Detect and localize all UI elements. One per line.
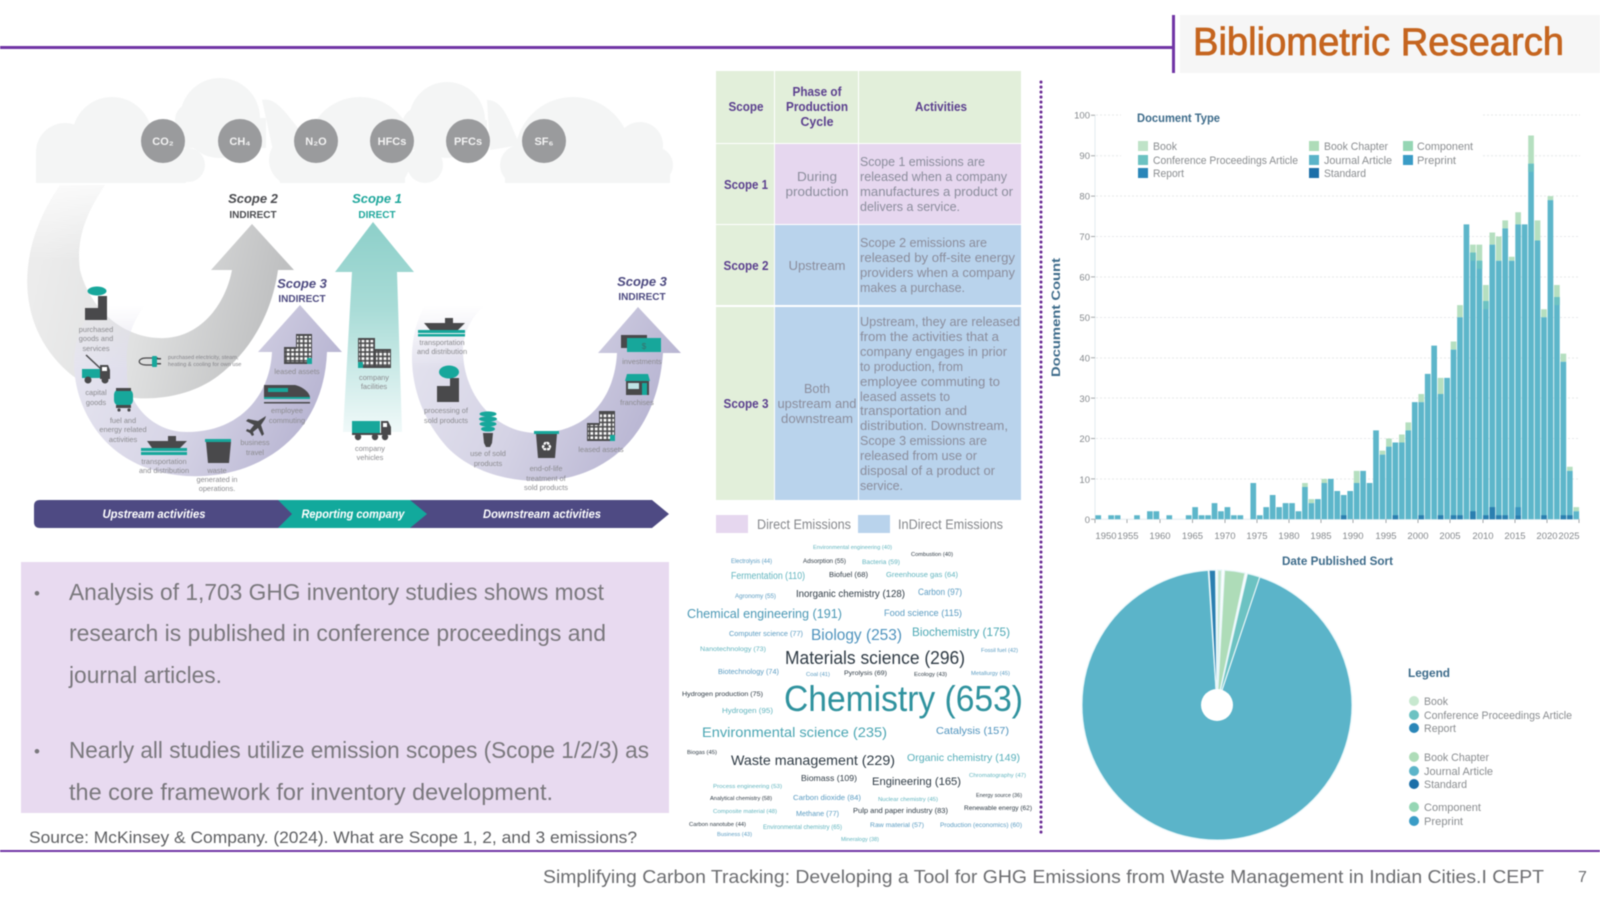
icon: processing factory: [437, 366, 459, 402]
x axis: 1965: [1182, 531, 1203, 542]
word cloud: Pulp and paper industry (83): [853, 806, 949, 815]
row: scope 1: Scope 1: [724, 177, 768, 192]
activity labels: use of sold: [470, 449, 506, 458]
word cloud: Biology (253): [811, 627, 902, 644]
row: scope 2: released by off-site energy: [860, 250, 1015, 265]
word cloud: Fossil fuel (42): [981, 648, 1018, 654]
activities bar: [34, 500, 669, 528]
word cloud: Bacteria (59): [862, 559, 900, 566]
activity labels: leased assets: [274, 367, 320, 376]
word cloud: Energy source (36): [976, 793, 1022, 799]
row: scope 3: leased assets to: [860, 389, 950, 404]
word cloud: Metallurgy (45): [971, 671, 1010, 677]
y axis: 50: [1079, 313, 1090, 324]
word cloud: Carbon (97): [918, 587, 962, 597]
word cloud: Carbon dioxide (84): [793, 793, 862, 802]
chart legend: Preprint: [1417, 155, 1456, 167]
chart legend: Report: [1153, 168, 1184, 180]
row: scope 3: employee commuting to: [860, 374, 1000, 389]
icon: waste container: [205, 439, 231, 463]
scope labels: INDIRECT: [229, 210, 277, 221]
row: scope 1: delivers a service.: [860, 199, 960, 214]
row: scope 3: released from use or: [860, 448, 978, 463]
pie legend: Book: [1424, 696, 1448, 708]
word cloud: Biogas (45): [687, 750, 717, 756]
activity labels: goods and: [79, 334, 113, 343]
y axis: 30: [1079, 394, 1090, 405]
scope labels: Scope 1: [352, 191, 402, 206]
chart legend: Book Chapter: [1324, 141, 1388, 153]
icon: train: [264, 385, 310, 404]
x axis: [1095, 519, 1580, 542]
activity labels: company: [355, 444, 385, 453]
row: scope 2: [724, 235, 1015, 295]
row: scope 3: service.: [860, 478, 903, 493]
word cloud: Ecology (43): [914, 672, 947, 678]
y axis: 80: [1079, 192, 1090, 202]
scope labels: DIRECT: [358, 210, 396, 221]
chart legend: Standard: [1324, 168, 1366, 180]
icon: bulb: [479, 411, 497, 447]
greenhouse gas circles: SF₆: [534, 136, 554, 148]
scope labels: Scope 2: [228, 191, 279, 206]
greenhouse gas circles: CH₄: [229, 136, 251, 148]
word cloud: Mineralogy (38): [841, 837, 879, 843]
chart legend: Component: [1417, 141, 1473, 153]
activity labels: sold products: [424, 416, 468, 425]
activity labels: and distribution: [417, 347, 467, 356]
y axis: 10: [1079, 475, 1090, 486]
activity labels: facilities: [361, 382, 387, 391]
icon: investments money: $: [642, 342, 647, 351]
x axis: 1950: [1095, 531, 1117, 542]
word cloud: Chemical engineering (191): [687, 606, 842, 621]
scope labels: INDIRECT: [618, 292, 666, 303]
x axis: 2015: [1504, 531, 1526, 542]
y axis title: Document Count: [1049, 258, 1063, 377]
footer: 7: [1578, 869, 1587, 886]
bars: [1098, 135, 1576, 519]
word cloud: Pyrolysis (69): [844, 670, 887, 677]
row: scope 3: Scope 3 emissions are: [860, 433, 987, 448]
pie legend: Legend: [1408, 666, 1450, 680]
icon: leased assets downstream: [587, 411, 615, 441]
activity labels: leased assets: [578, 445, 624, 454]
row: scope 2: Scope 2 emissions are: [860, 235, 987, 250]
word cloud: Food science (115): [884, 608, 962, 618]
activity labels: services: [82, 344, 110, 353]
word cloud: Electrolysis (44): [731, 559, 772, 565]
x axis: 1960: [1149, 531, 1171, 542]
table header: Cycle: [800, 114, 834, 129]
icon: leased assets upstream: [284, 334, 312, 364]
y axis: 60: [1079, 272, 1090, 284]
word cloud: Environmental engineering (40): [813, 545, 892, 551]
word cloud: Waste management (229): [731, 752, 895, 768]
table header: Activities: [915, 99, 967, 114]
activity labels: [79, 325, 662, 493]
activities bar: Reporting company: [302, 507, 406, 521]
pie legend: Conference Proceedings Article: [1424, 710, 1572, 722]
word cloud: Adsorption (55): [803, 558, 846, 565]
word cloud: Engineering (165): [872, 776, 961, 788]
word cloud: Chromatography (47): [969, 773, 1026, 779]
word cloud: Process engineering (53): [713, 784, 782, 790]
header rule: [0, 15, 1175, 73]
icon: recycling bin: [534, 431, 559, 458]
row: scope 2: Upstream: [788, 258, 846, 273]
activity labels: heating & cooling for own use: [168, 362, 241, 368]
pie legend: Book Chapter: [1424, 752, 1489, 764]
panel: key findings: research is published in conference proceedings and: [69, 620, 606, 646]
row: scope 2: makes a purchase.: [860, 280, 965, 295]
chart legend: Book: [1153, 141, 1177, 153]
row: scope 3: company engages in prior: [860, 344, 1008, 359]
word cloud: Raw material (57): [870, 822, 924, 829]
word cloud: Methane (77): [796, 811, 839, 818]
word cloud: Agronomy (55): [735, 594, 776, 600]
icon: investments money: [621, 335, 661, 352]
panel: document count bar chart: [1049, 110, 1580, 542]
table legend: Direct Emissions: [757, 517, 851, 532]
row: scope 3: transportation and: [860, 403, 967, 418]
pie legend: Preprint: [1424, 816, 1463, 828]
row: scope 1: released when a company: [860, 169, 1007, 184]
icon: company vehicle: [352, 421, 391, 440]
word cloud: Catalysis (157): [936, 725, 1009, 737]
panel: scope table: [716, 71, 1021, 500]
word cloud: Hydrogen (95): [722, 706, 774, 715]
activities bar: Downstream activities: [483, 507, 601, 521]
scope labels: [228, 191, 668, 305]
x axis: 1975: [1246, 531, 1268, 542]
word cloud: Inorganic chemistry (128): [796, 589, 905, 600]
activity labels: purchased: [79, 325, 113, 334]
icon: recycling bin: ♻: [541, 439, 552, 454]
activity labels: products: [474, 459, 502, 468]
icon: company facilities: [358, 338, 391, 368]
panel: document type pie chart: [1082, 554, 1572, 840]
y axis: 70: [1079, 232, 1090, 243]
panel: key findings: Nearly all studies utilize emission scopes (Scope 1/2/3) as: [69, 737, 649, 763]
row: scope 3: Scope 3: [724, 396, 768, 411]
greenhouse gas circles: HFCs: [378, 136, 406, 148]
activity labels: company: [359, 373, 389, 382]
word cloud: Biotechnology (74): [718, 669, 779, 676]
word cloud: Nuclear chemistry (45): [878, 797, 938, 803]
activity labels: processing of: [424, 406, 469, 415]
panel: key findings: •: [34, 584, 40, 603]
activity labels: treatment of: [526, 474, 567, 483]
row: scope 3: distribution. Downstream,: [860, 418, 1008, 433]
footer: Simplifying Carbon Tracking: Developing a Tool for GHG Emissions from Waste Management in Indian Cities.I CEPT: [543, 867, 1544, 887]
icon: plug: [139, 356, 161, 367]
word cloud: Environmental science (235): [702, 724, 887, 740]
greenhouse gas circles: N₂O: [305, 136, 327, 148]
pie title: Date Published Sort: [1282, 554, 1393, 568]
row: scope 1: [724, 154, 1014, 214]
x axis: 1990: [1342, 531, 1364, 542]
pie legend: Report: [1424, 723, 1456, 735]
activity labels: transportation: [419, 338, 465, 347]
scope 1 arrow: [335, 222, 414, 432]
table legend: [716, 515, 1003, 533]
scope 3 downstream arrow: [412, 305, 681, 481]
activity labels: franchises: [620, 398, 654, 407]
icon: downstream ship: [418, 318, 465, 336]
row: scope 3: downstream: [781, 411, 853, 426]
word cloud: Production (economics) (60): [940, 822, 1022, 829]
word cloud: Fermentation (110): [731, 571, 805, 582]
activity labels: travel: [246, 448, 264, 457]
x axis: 1985: [1310, 531, 1332, 542]
activity labels: end-of-life: [530, 464, 562, 473]
y axis: [1074, 110, 1095, 526]
activity labels: and distribution: [139, 466, 189, 475]
y axis: 20: [1079, 434, 1090, 445]
scope 3 upstream arrow: [74, 305, 342, 476]
panel: key findings: the core framework for inventory development.: [69, 779, 553, 805]
row: scope 1: manufactures a product or: [860, 184, 1014, 199]
row: scope 3: Both: [804, 381, 830, 396]
pie legend: [1408, 666, 1572, 828]
row: scope 1: Scope 1 emissions are: [860, 154, 985, 169]
word cloud: [682, 545, 1032, 843]
activity labels: business: [240, 438, 270, 447]
word cloud: Coal (41): [806, 672, 830, 678]
scope labels: Scope 3: [277, 276, 328, 291]
chart legend: Document Type: [1137, 111, 1220, 125]
x axis: 2025: [1558, 531, 1580, 542]
panel: scope emissions diagram: [27, 78, 681, 528]
greenhouse gas circles: [141, 119, 566, 163]
scope 2 arrow: [27, 185, 294, 398]
panel: key findings: [21, 562, 669, 813]
pie slices: [1082, 570, 1352, 840]
activity labels: investments: [622, 357, 662, 366]
activity labels: purchased electricity, steam,: [168, 355, 239, 361]
activity labels: commuting: [269, 416, 305, 425]
title: Bibliometric Research: [1193, 21, 1564, 64]
word cloud: Biofuel (68): [829, 570, 869, 579]
row: scope 1: During: [797, 169, 837, 184]
activity labels: employee: [271, 406, 303, 415]
table cell backgrounds: [716, 71, 1021, 500]
icon: upstream ship: [141, 436, 187, 455]
word cloud: Biomass (109): [801, 773, 857, 783]
icon: capital goods truck: [82, 355, 110, 384]
table header: Phase of: [792, 84, 842, 99]
x axis: 1970: [1214, 531, 1236, 542]
source note: Source: McKinsey & Company. (2024). What are Scope 1, 2, and 3 emissions?: [29, 828, 637, 847]
row: scope 3: from the activities that a: [860, 329, 1000, 344]
panel: key findings: •: [34, 742, 40, 761]
word cloud: Biochemistry (175): [912, 625, 1010, 639]
x axis: 2010: [1472, 531, 1494, 542]
pie legend: Journal Article: [1424, 766, 1493, 778]
word cloud: Business (43): [717, 832, 752, 838]
icon: purchased goods factory: [85, 286, 107, 320]
row: scope 3: disposal of a product or: [860, 463, 996, 478]
y axis: 0: [1085, 515, 1090, 526]
x axis: 2005: [1439, 531, 1461, 542]
greenhouse gas circles: PFCs: [454, 136, 482, 148]
panel: key findings: Analysis of 1,703 GHG inventory studies shows most: [69, 579, 605, 605]
y axis: 40: [1079, 354, 1090, 364]
panel: key findings: journal articles.: [68, 662, 222, 688]
word cloud: Renewable energy (62): [964, 806, 1032, 812]
scope labels: INDIRECT: [278, 294, 326, 305]
x axis: 2020: [1536, 531, 1558, 542]
row: scope 1: production: [786, 184, 848, 199]
row: scope 3: [724, 314, 1020, 493]
activity labels: transportation: [141, 457, 187, 466]
word cloud: Chemistry (653): [784, 678, 1023, 719]
row: scope 2: providers when a company: [860, 265, 1015, 280]
title: [1180, 15, 1600, 73]
clouds: [36, 78, 672, 182]
word cloud: Environmental chemistry (65): [763, 824, 842, 831]
table legend: InDirect Emissions: [898, 517, 1003, 532]
activity labels: activities: [109, 435, 137, 444]
table header: Scope: [728, 99, 764, 114]
activity labels: energy related: [99, 425, 147, 434]
row: scope 2: Scope 2: [724, 258, 768, 273]
activity labels: generated in: [196, 475, 238, 484]
word cloud: Analytical chemistry (58): [710, 796, 772, 802]
scope labels: Scope 3: [617, 274, 668, 289]
activity labels: sold products: [524, 483, 568, 492]
word cloud: Computer science (77): [729, 631, 803, 638]
y axis: 100: [1074, 110, 1090, 122]
word cloud: Hydrogen production (75): [682, 691, 763, 698]
activity labels: capital: [85, 388, 107, 397]
word cloud: Greenhouse gas (64): [886, 570, 958, 579]
table header: [728, 84, 967, 129]
word cloud: Materials science (296): [785, 648, 965, 668]
x axis: 2000: [1407, 531, 1429, 542]
chart legend: Journal Article: [1324, 155, 1392, 167]
word cloud: Nanotechnology (73): [700, 646, 766, 653]
word cloud: Composite material (48): [713, 809, 777, 815]
x axis: 1980: [1278, 531, 1300, 542]
activity labels: fuel and: [110, 416, 136, 425]
pie legend: Component: [1424, 802, 1481, 814]
activity labels: goods: [86, 398, 106, 407]
y axis: 90: [1079, 151, 1090, 162]
activity labels: waste: [206, 466, 227, 475]
word cloud: Organic chemistry (149): [907, 752, 1020, 764]
activities bar: Upstream activities: [102, 507, 206, 521]
activity labels: operations.: [199, 484, 235, 493]
x axis: 1955: [1117, 531, 1139, 542]
table header: Production: [786, 99, 848, 114]
greenhouse gas circles: CO₂: [152, 136, 174, 148]
row: scope 3: to production, from: [860, 359, 963, 374]
chart legend: Conference Proceedings Article: [1153, 155, 1298, 167]
icon: franchise store: [625, 374, 650, 395]
row: scope 3: upstream and: [778, 396, 856, 411]
activity labels: vehicles: [357, 453, 384, 462]
word cloud: Carbon nanotube (44): [689, 822, 746, 828]
pie legend: Standard: [1424, 779, 1467, 791]
row: scope 3: Upstream, they are released: [860, 314, 1020, 329]
chart legend: [1137, 111, 1473, 180]
icon: plane: [246, 416, 266, 436]
x axis: 1995: [1375, 531, 1397, 542]
icon: fuel tanker: [114, 388, 133, 412]
word cloud: Combustion (40): [911, 552, 953, 558]
